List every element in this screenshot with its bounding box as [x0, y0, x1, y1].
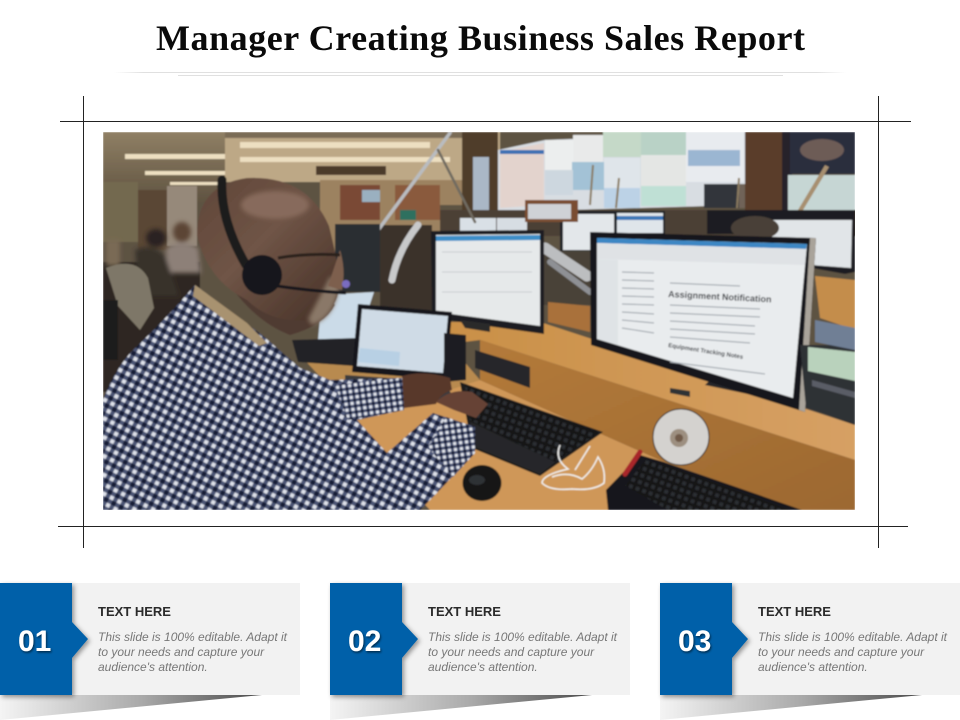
- card 01 blue tab: [0, 583, 88, 695]
- monitor arms and poles: [350, 133, 590, 292]
- help desk sign: [525, 200, 578, 222]
- card 01 body: This slide is 100% editable. Adapt it: [98, 630, 288, 644]
- card 02 blue tab: [330, 583, 418, 695]
- card 03 blue tab: [660, 583, 748, 695]
- background: ceiling and office: [103, 132, 855, 510]
- card 02 panel: [330, 583, 630, 695]
- card 03 body: This slide is 100% editable. Adapt it: [758, 630, 948, 644]
- screen heading: equipment tracking notes: Equipment Tracking Notes: [668, 343, 744, 361]
- screen heading: assignment notification: Assignment Notification: [668, 289, 772, 304]
- desk phone: [800, 320, 855, 424]
- card 01 body: audience's attention.: [98, 660, 208, 674]
- card 03: [660, 583, 960, 720]
- second keyboard: [606, 455, 802, 510]
- right dark wall and screen: [745, 132, 855, 215]
- card 01 heading: TEXT HERE: [98, 604, 171, 619]
- card 03 body: audience's attention.: [758, 660, 868, 674]
- card 02 heading: TEXT HERE: [428, 604, 501, 619]
- laptop: [345, 304, 466, 405]
- back laptop: [292, 292, 374, 366]
- card 02 body: audience's attention.: [428, 660, 538, 674]
- back monitors: [440, 210, 860, 274]
- large monitor: assignment notification: [590, 232, 855, 425]
- card 03 number: 03: [678, 625, 711, 658]
- card 01: [0, 583, 300, 720]
- card 03 floor shadow: [660, 695, 922, 720]
- card 03 body: to your needs and capture your: [758, 645, 925, 659]
- center monitor: [431, 230, 544, 334]
- wall display: [496, 132, 746, 212]
- man: hands: [402, 373, 488, 418]
- compact disc: [653, 409, 709, 465]
- card 01 body: to your needs and capture your: [98, 645, 265, 659]
- keyboard: [460, 382, 603, 476]
- card 01 panel: [0, 583, 300, 695]
- card 03 heading: TEXT HERE: [758, 604, 831, 619]
- man: shirt: [103, 285, 475, 510]
- card 01 number: 01: [18, 625, 51, 658]
- earphones: [542, 445, 604, 489]
- left people and chair: [103, 222, 201, 392]
- card 02 number: 02: [348, 625, 381, 658]
- power strip: [475, 350, 530, 388]
- card 02: [330, 583, 630, 720]
- man: neck and head: [197, 178, 344, 335]
- card 03 panel: [660, 583, 960, 695]
- card 02 floor shadow: [330, 695, 592, 720]
- title: Manager Creating Business Sales Report: [156, 18, 805, 58]
- card 02 body: to your needs and capture your: [428, 645, 595, 659]
- monitor stand shadows: [335, 224, 380, 292]
- mouse: [462, 465, 502, 501]
- red pen: [625, 452, 640, 474]
- card 01 floor shadow: [0, 695, 262, 720]
- headset: [222, 180, 350, 295]
- card 02 body: This slide is 100% editable. Adapt it: [428, 630, 618, 644]
- crop frame lines: [58, 96, 911, 548]
- title underline: [114, 72, 846, 76]
- desk surfaces: [300, 276, 855, 510]
- photo: manager at workstation: [103, 132, 860, 510]
